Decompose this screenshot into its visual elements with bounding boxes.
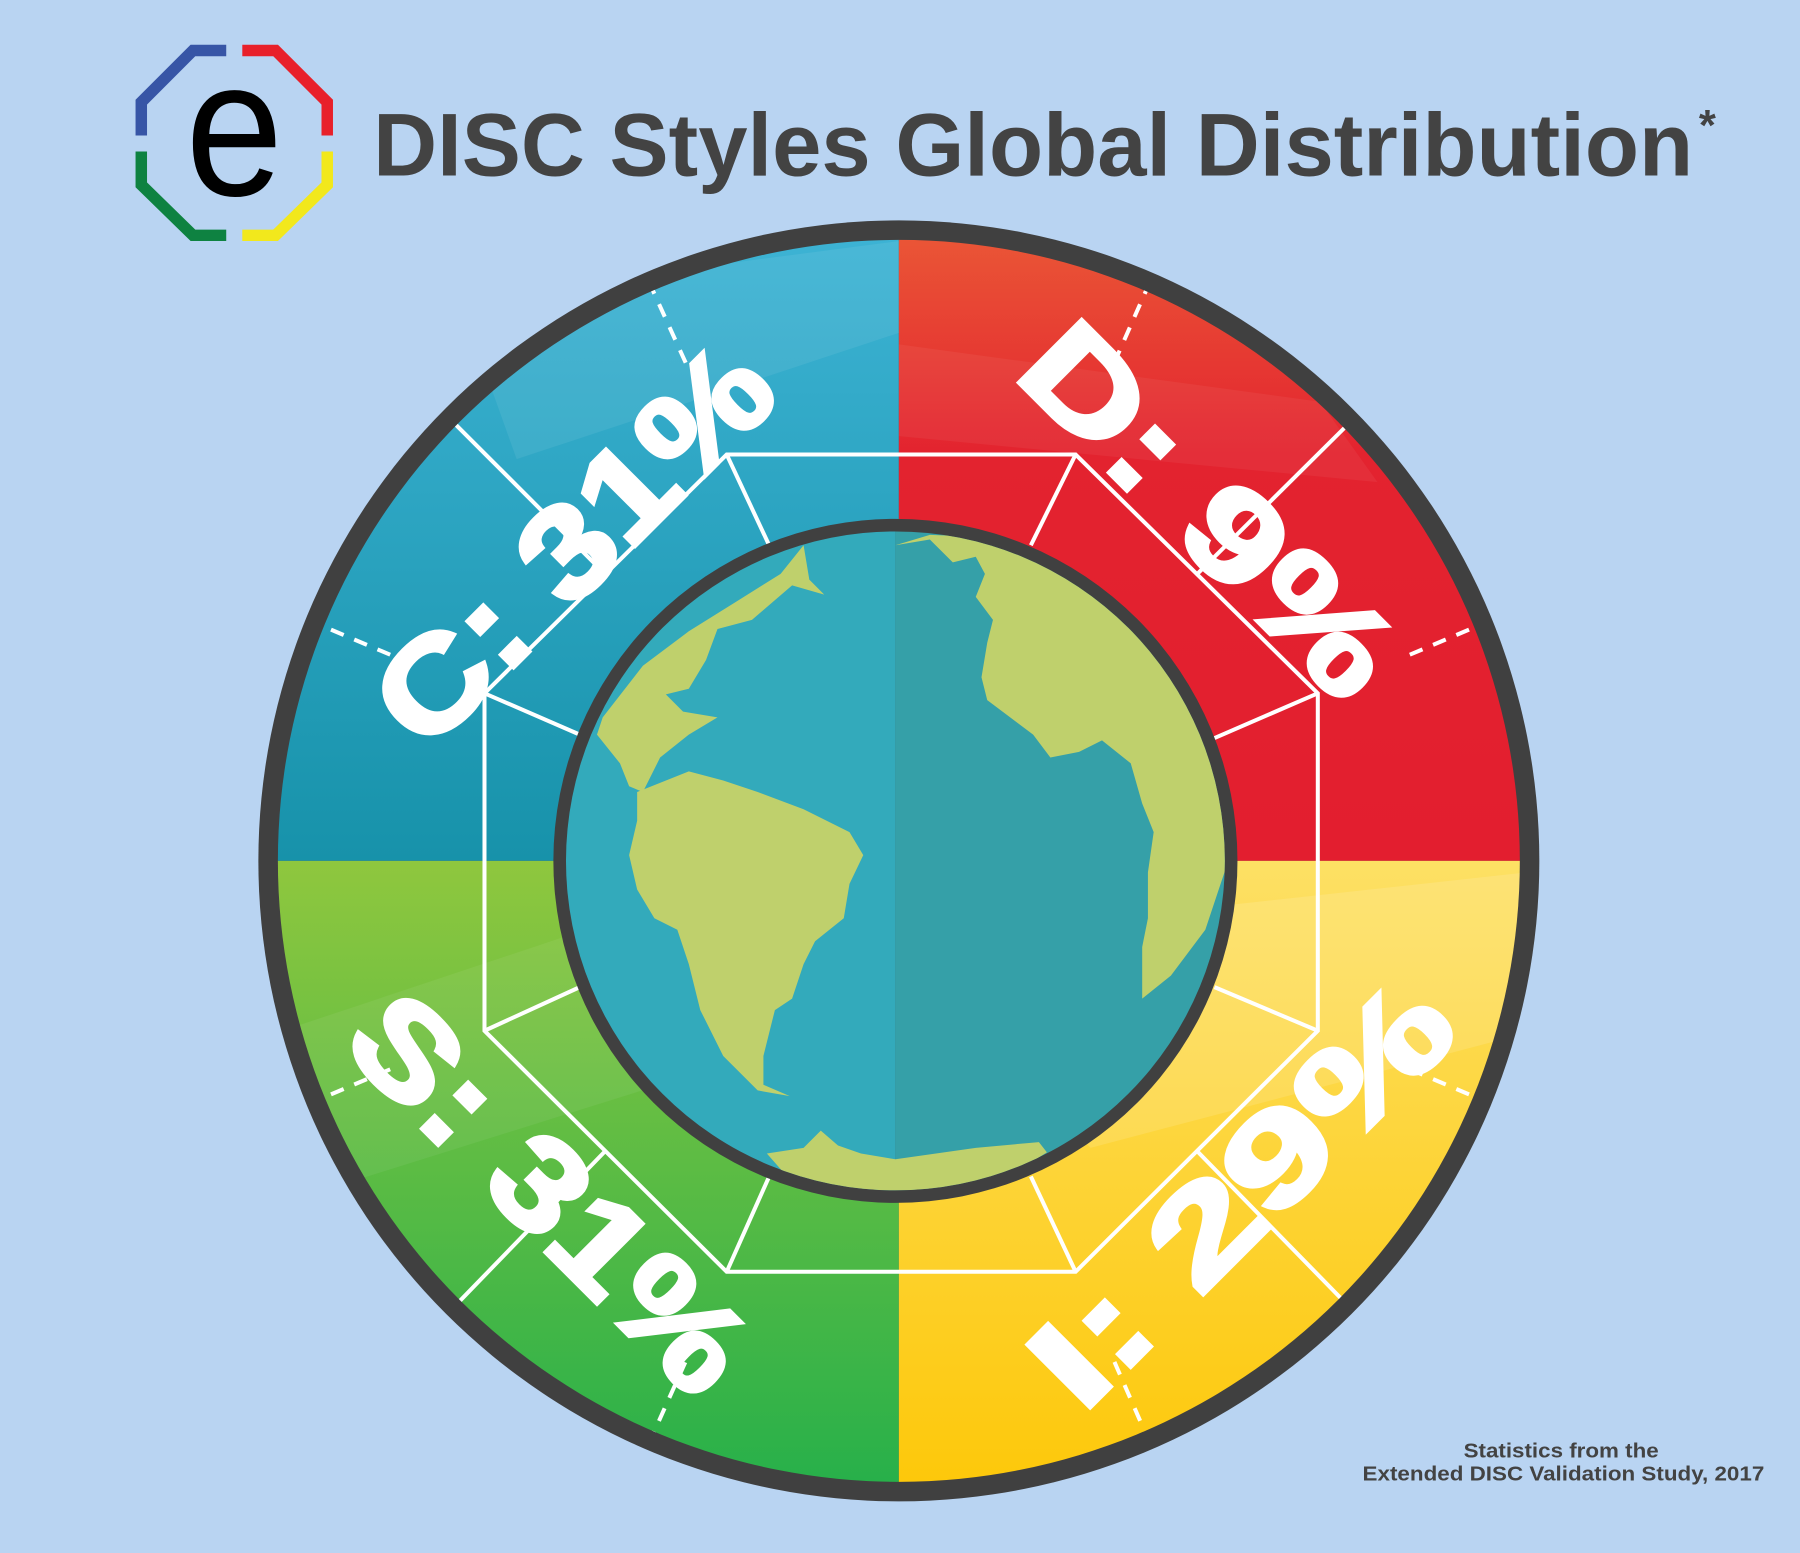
title: DISC Styles Global Distribution: [373, 95, 1693, 195]
logo: Extended DISC octagon: e: [185, 20, 283, 237]
continent: South America: [629, 771, 863, 1096]
quadrant: D: [899, 235, 1524, 861]
quadrant: S: [276, 861, 899, 1486]
logo: Extended DISC octagon: [141, 20, 327, 237]
continent: Africa: [895, 535, 1228, 999]
label: D 9%: D: 9%: [992, 294, 1426, 728]
title asterisk: *: [1699, 102, 1716, 150]
footnote source: Extended DISC Validation Study, 2017: [1363, 1463, 1764, 1486]
DISC quadrant wheel: [276, 235, 1527, 1486]
outer ring: [258, 220, 1539, 1501]
quadrant: C: [276, 235, 899, 861]
footnote source: [1363, 1440, 1764, 1486]
label: C 31%: C: 31%: [345, 316, 803, 774]
quadrant: I: [899, 861, 1524, 1486]
footnote source: Statistics from the: [1464, 1440, 1659, 1463]
continent: Antarctica: [767, 1130, 1047, 1190]
octagon lines: [453, 422, 1345, 1304]
continent: North America: [597, 545, 824, 792]
globe: [553, 519, 1237, 1203]
label: S 31%: S: 31%: [320, 965, 778, 1423]
label: I 29%: I: 29%: [1001, 952, 1483, 1435]
